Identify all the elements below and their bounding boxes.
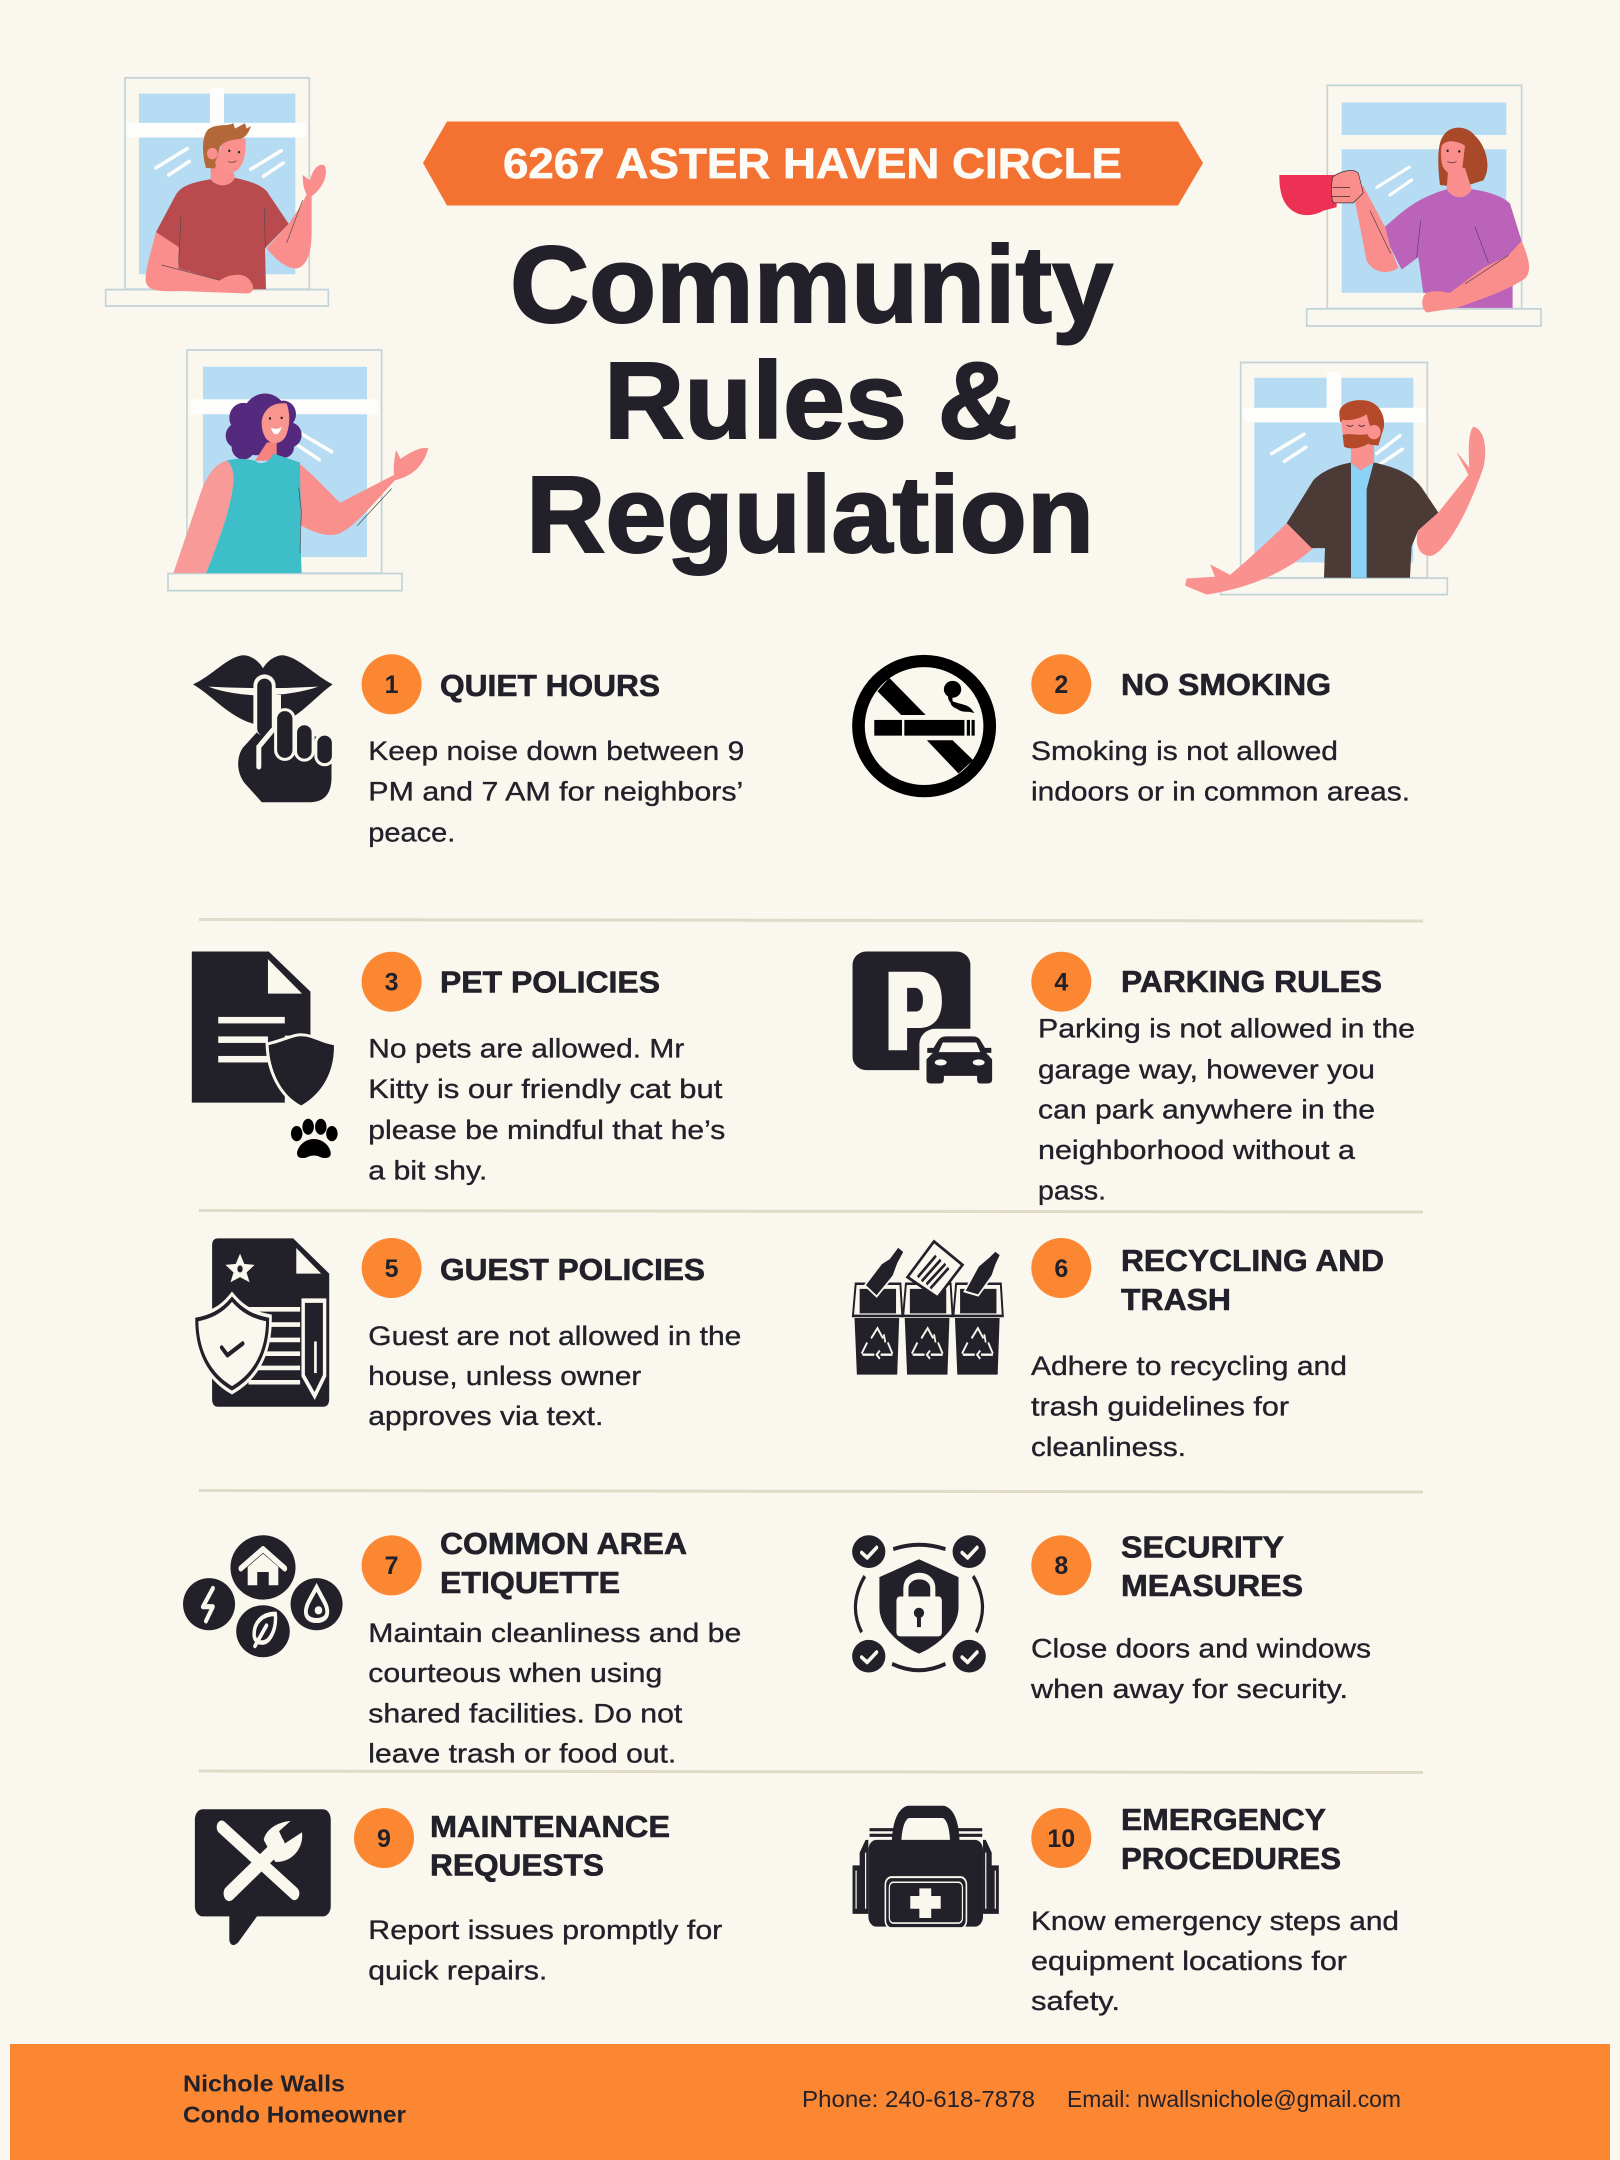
heading: QUIET HOURS <box>440 669 660 703</box>
body text <box>368 1618 741 1768</box>
body text: Kitty is our friendly cat but <box>368 1074 723 1104</box>
heading: PROCEDURES <box>1121 1842 1341 1876</box>
body text: neighborhood without a <box>1038 1135 1356 1165</box>
panel: rule 5 guest policies <box>197 1238 741 1431</box>
number badge 9: 9 <box>377 1825 391 1853</box>
body text: courteous when using <box>368 1658 662 1688</box>
banner: address <box>423 122 1203 206</box>
number badge 10: 10 <box>1047 1825 1075 1853</box>
heading: PARKING RULES <box>1121 965 1382 999</box>
number badge 6 <box>1031 1238 1091 1298</box>
body text: Smoking is not allowed <box>1031 736 1338 766</box>
heading: REQUESTS <box>430 1848 604 1882</box>
panel: rule 1 quiet hours <box>193 654 744 848</box>
panel: rule 6 recycling and trash <box>853 1238 1384 1462</box>
icon: first aid bag <box>853 1806 999 1928</box>
body text: house, unless owner <box>368 1361 641 1391</box>
body text: Know emergency steps and <box>1031 1906 1399 1936</box>
banner: address: 6267 ASTER HAVEN CIRCLE <box>503 140 1122 188</box>
body text: Adhere to recycling and <box>1031 1351 1347 1381</box>
body text: peace. <box>368 818 455 848</box>
heading: ETIQUETTE <box>440 1566 620 1600</box>
body text <box>1031 1906 1399 2016</box>
number badge 7 <box>362 1535 422 1595</box>
panel: rule 2 no smoking <box>858 654 1410 806</box>
body text: approves via text. <box>368 1401 603 1431</box>
heading <box>1121 1803 1341 1876</box>
body text: pass. <box>1038 1176 1106 1206</box>
heading: COMMON AREA <box>440 1527 687 1561</box>
body text: when away for security. <box>1030 1674 1348 1704</box>
heading: MEASURES <box>1121 1569 1303 1603</box>
icon: speech bubble with wrench and screwdriver <box>195 1809 331 1945</box>
number badge 2: 2 <box>1054 671 1068 699</box>
title: Community <box>510 224 1113 346</box>
heading: NO SMOKING <box>1121 668 1331 702</box>
panel: rule 10 emergency procedures <box>853 1803 1399 2016</box>
body text <box>1030 1634 1371 1704</box>
heading: PET POLICIES <box>440 966 660 1000</box>
heading: MAINTENANCE <box>430 1810 670 1844</box>
icon: shushing lips and finger <box>193 655 337 802</box>
footer name: Condo Homeowner <box>183 2102 406 2128</box>
icon: no smoking sign <box>858 661 990 791</box>
panel: rule 8 security measures <box>852 1530 1371 1704</box>
number badge 7: 7 <box>385 1552 399 1580</box>
heading: EMERGENCY <box>1121 1803 1326 1837</box>
icon: document with shield and pencil <box>197 1238 329 1407</box>
body text: Parking is not allowed in the <box>1038 1014 1415 1044</box>
body text: PM and 7 AM for neighbors’ <box>368 776 743 806</box>
body text: quick repairs. <box>368 1956 547 1986</box>
heading: TRASH <box>1121 1283 1231 1317</box>
panel: rule 3 pet policies <box>192 951 725 1186</box>
number badge 4 <box>1031 952 1091 1012</box>
title: Regulation <box>526 454 1094 576</box>
body text: indoors or in common areas. <box>1031 776 1410 806</box>
body text: leave trash or food out. <box>368 1738 676 1768</box>
footer name: Nichole Walls <box>183 2070 345 2096</box>
heading <box>1121 1244 1384 1317</box>
footer contact details: Phone: 240-618-7878 <box>802 2086 1035 2112</box>
illustration: woman in purple shirt holding a red cup at window <box>1279 85 1541 326</box>
number badge 8: 8 <box>1054 1552 1068 1580</box>
number badge 5 <box>362 1238 422 1298</box>
body text: cleanliness. <box>1031 1432 1186 1462</box>
footer name <box>183 2070 406 2128</box>
icon: shield with padlock and checks <box>852 1535 986 1673</box>
number badge 2 <box>1031 654 1091 714</box>
panel: rule 7 common area etiquette <box>183 1527 741 1768</box>
heading <box>430 1810 670 1882</box>
body text <box>368 1321 741 1431</box>
body text <box>1038 1014 1415 1206</box>
number badge 5: 5 <box>385 1255 399 1283</box>
heading: RECYCLING AND <box>1121 1244 1384 1278</box>
body text: a bit shy. <box>368 1156 487 1186</box>
heading: SECURITY <box>1121 1530 1284 1564</box>
body text: Keep noise down between 9 <box>368 736 744 766</box>
heading <box>1121 1530 1303 1603</box>
heading <box>440 1527 687 1600</box>
body text: Close doors and windows <box>1031 1634 1371 1664</box>
body text <box>1031 736 1410 806</box>
number badge 10 <box>1031 1808 1091 1868</box>
body text: Report issues promptly for <box>368 1915 722 1945</box>
number badge 9 <box>354 1808 414 1868</box>
body text: please be mindful that he’s <box>368 1115 725 1145</box>
panel: rule 4 parking rules <box>853 951 1415 1206</box>
number badge 6: 6 <box>1054 1255 1068 1283</box>
body text <box>368 1915 722 1986</box>
illustration: bearded man in dark jacket waving at window <box>1185 362 1485 595</box>
body text: can park anywhere in the <box>1038 1094 1375 1124</box>
body text: safety. <box>1031 1986 1120 2016</box>
body text: Maintain cleanliness and be <box>368 1618 741 1648</box>
panel: rule 9 maintenance requests <box>195 1808 722 1986</box>
title: Rules & <box>604 340 1018 462</box>
number badge 4: 4 <box>1054 968 1068 996</box>
number badge 8 <box>1031 1535 1091 1595</box>
icon: three recycling bins <box>853 1241 1003 1375</box>
title <box>510 224 1113 576</box>
icon: document with shield and paw <box>192 951 338 1158</box>
icon: parking sign with car <box>853 951 998 1088</box>
footer contact details: Email: nwallsnichole@gmail.com <box>1067 2086 1401 2112</box>
body text <box>1031 1351 1347 1462</box>
body text: Guest are not allowed in the <box>368 1321 741 1351</box>
illustration: man in red shirt waving at window <box>106 78 328 306</box>
number badge 1 <box>362 654 422 714</box>
body text: trash guidelines for <box>1031 1392 1289 1422</box>
illustration: woman in teal dress at window <box>168 350 428 591</box>
body text: shared facilities. Do not <box>368 1698 683 1728</box>
body text <box>368 1034 725 1186</box>
body text: equipment locations for <box>1031 1946 1347 1976</box>
body text <box>368 736 744 848</box>
body text: No pets are allowed. Mr <box>368 1034 684 1064</box>
number badge 3 <box>362 952 422 1012</box>
footer band <box>10 2044 1610 2160</box>
icon: house, energy, water and leaf circles <box>183 1535 343 1657</box>
footer contact details <box>802 2086 1401 2112</box>
number badge 3: 3 <box>385 968 399 996</box>
heading: GUEST POLICIES <box>440 1253 705 1287</box>
number badge 1: 1 <box>385 671 399 699</box>
body text: garage way, however you <box>1038 1054 1375 1084</box>
